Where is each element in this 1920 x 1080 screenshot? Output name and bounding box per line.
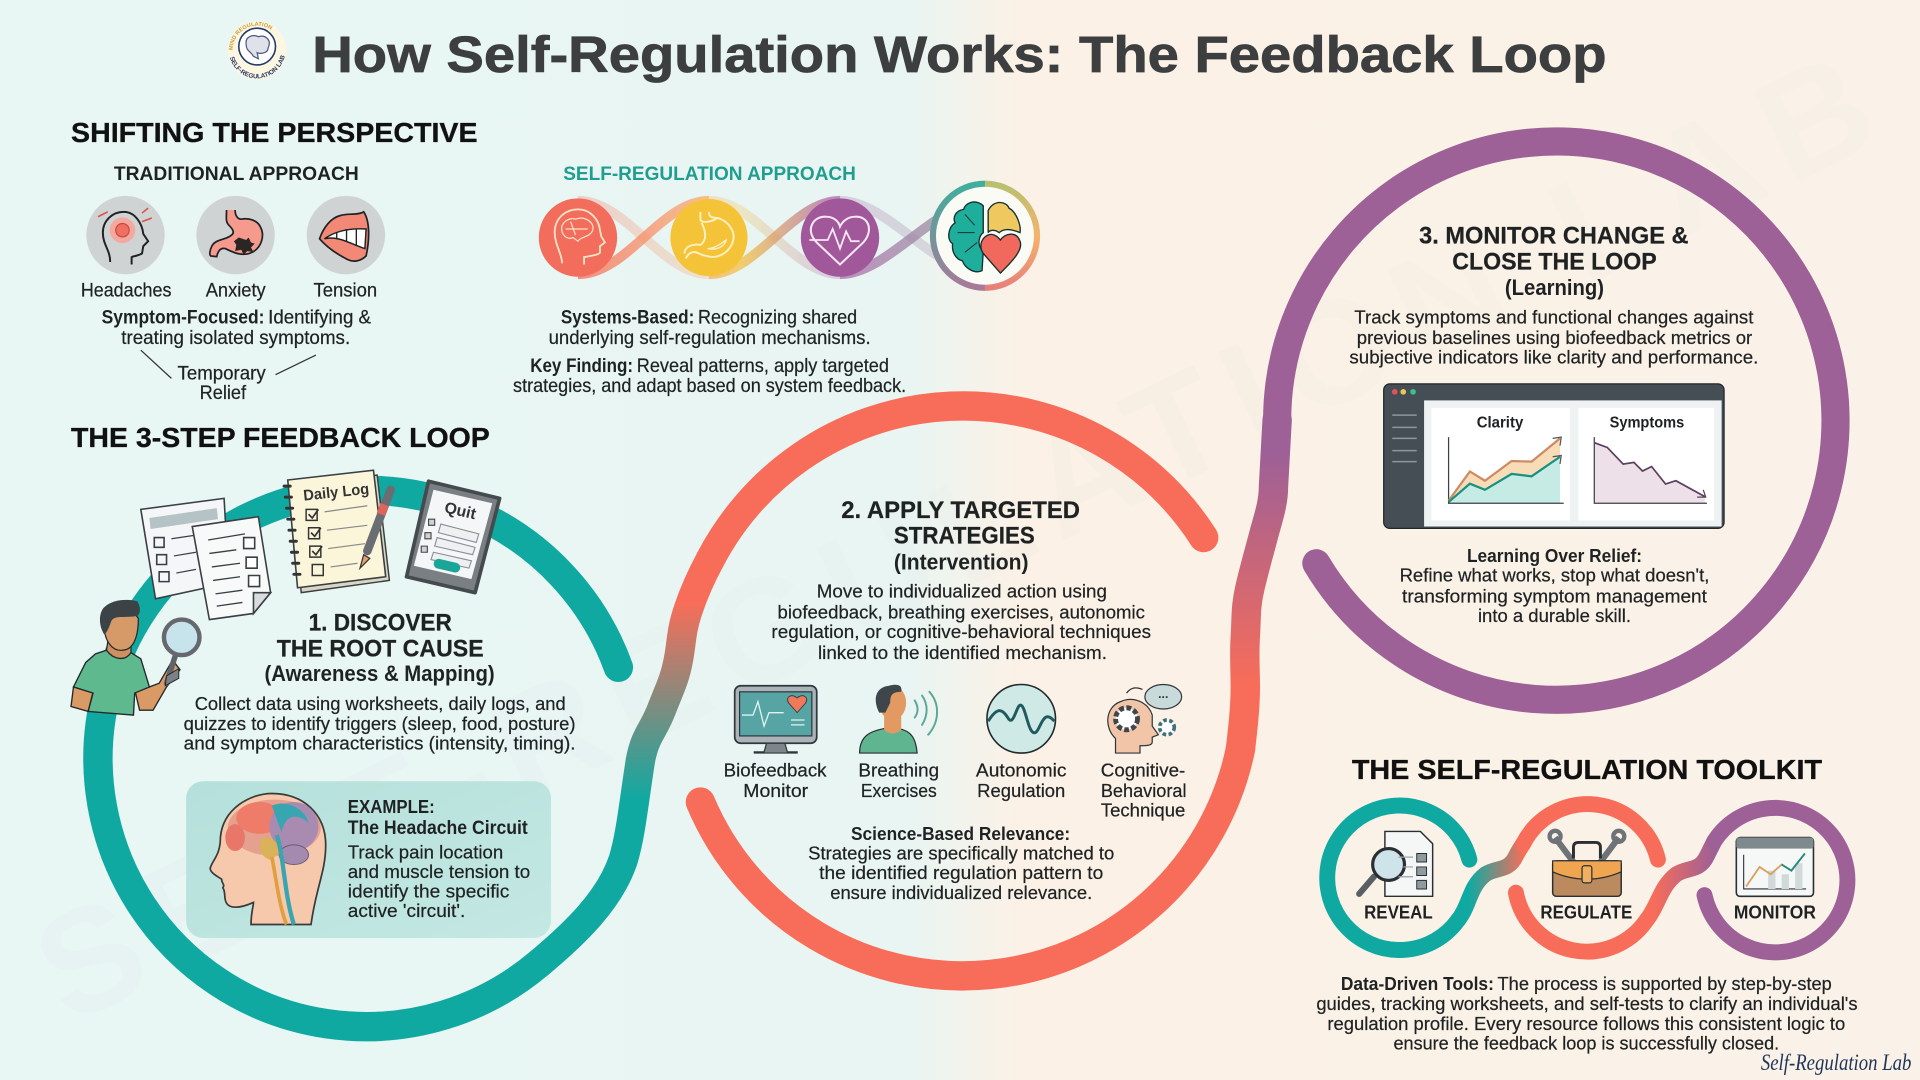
callout: temporary relief — [141, 350, 316, 404]
icon: worksheets — [141, 498, 271, 620]
heading: step 3: CLOSE THE LOOP — [1452, 248, 1657, 275]
icon: headache — [86, 196, 165, 274]
text: systems-based: Recognizing shared — [698, 307, 857, 328]
text: key finding: strategies, and adapt based on system feedback. — [513, 376, 906, 397]
text: key finding: Reveal patterns, apply targeted — [637, 356, 889, 377]
labels: strategy tools: Breathing — [858, 759, 939, 780]
heading: step 3: 3. MONITOR CHANGE & — [1419, 223, 1689, 250]
labels: strategy tools: Cognitive- — [1101, 759, 1185, 780]
heading: step 1: (Awareness & Mapping) — [264, 661, 495, 686]
callout: temporary relief: Temporary — [178, 364, 266, 385]
labels: strategy tools: Exercises — [861, 780, 937, 801]
icon: quiz tablet: Quit — [443, 500, 478, 523]
labels: strategy tools: Technique — [1101, 800, 1185, 821]
heading: step 2: STRATEGIES — [894, 523, 1035, 550]
text: key finding: Key Finding: — [530, 356, 633, 377]
icon: monitor window — [1736, 838, 1813, 896]
logo — [228, 21, 286, 80]
panel: self-regulation approach — [513, 164, 1037, 397]
logo: MIND REGULATION — [228, 22, 272, 50]
icon: quiz tablet — [407, 481, 500, 593]
text: symptom-focused — [102, 307, 371, 349]
chart: clarity — [1431, 408, 1570, 520]
text: learning over relief: Learning Over Relief: — [1467, 545, 1642, 566]
panel: toolkit — [1316, 754, 1858, 1053]
icon: regulate toolkit — [1550, 831, 1624, 896]
icon: integrated brain and heart — [933, 184, 1037, 288]
labels: symptoms: Anxiety — [206, 280, 266, 301]
heading: step 1: 1. DISCOVER — [309, 610, 452, 637]
icon: purple heart pulse — [801, 198, 879, 277]
text: example — [348, 796, 530, 921]
panel: step 2 apply — [724, 497, 1187, 903]
text: step 2 description: linked to the identified mechanism. — [818, 642, 1107, 663]
chart: symptoms: Symptoms — [1610, 414, 1684, 431]
labels: strategy tools: Regulation — [977, 780, 1065, 801]
text: science-based relevance: the identified regulation pattern to — [819, 862, 1103, 883]
labels: symptoms: Headaches — [81, 280, 171, 301]
heading: the 3-step feedback loop: THE 3-STEP FEEDBACK LOOP — [71, 422, 490, 453]
text: example: Track pain location — [348, 841, 503, 862]
icon: daily log notebook: Daily Log — [302, 481, 370, 505]
heading: step 1 — [264, 610, 495, 686]
labels: strategy tools: Biofeedback — [724, 759, 827, 780]
text: systems-based — [549, 307, 871, 349]
panel: step 1 discover — [71, 470, 576, 938]
heading: step 2 — [841, 497, 1080, 574]
callout: temporary relief: Relief — [200, 383, 247, 404]
text: step 2 description: Move to individualized action using — [817, 581, 1107, 602]
text: data-driven tools: Data-Driven Tools: — [1341, 973, 1494, 994]
heading: shifting the perspective: SHIFTING THE PERSPECTIVE — [71, 117, 478, 148]
icon: biofeedback monitor — [735, 686, 817, 753]
labels: strategy tools: Autonomic — [976, 759, 1067, 780]
panel: traditional approach — [81, 164, 385, 404]
text: step 3 description: subjective indicators like clarity and performance. — [1349, 347, 1758, 368]
heading: step 2: 2. APPLY TARGETED — [841, 497, 1080, 524]
labels: symptoms — [81, 280, 377, 301]
text: symptom-focused: Symptom-Focused: — [102, 307, 264, 328]
panel: example headache circuit — [186, 781, 551, 938]
text: step 2 description: biofeedback, breathing exercises, autonomic — [778, 601, 1145, 622]
icon: tension mouth — [307, 196, 385, 274]
title: How Self-Regulation Works: The Feedback Loop — [312, 26, 1607, 83]
text: step 1 description: and symptom characteristics (intensity, timing). — [184, 732, 576, 753]
text: symptom-focused: Identifying & — [268, 307, 371, 328]
text: step 3 description: previous baselines using biofeedback metrics or — [1357, 327, 1752, 348]
icon: cognitive behavioral — [1108, 684, 1182, 753]
chart: dashboard — [1384, 384, 1724, 528]
heading: toolkit: THE SELF-REGULATION TOOLKIT — [1352, 754, 1822, 785]
icon: person with magnifier — [71, 600, 199, 715]
text: step 1 description: quizzes to identify triggers (sleep, food, posture) — [184, 713, 576, 734]
text: example: and muscle tension to — [348, 861, 530, 882]
text: learning over relief: into a durable skill. — [1478, 605, 1631, 626]
icon: head with brain circuit — [210, 793, 326, 924]
text: learning over relief: Refine what works, stop what doesn't, — [1400, 565, 1709, 586]
icon: gold stomach — [670, 199, 748, 276]
heading: step 3: (Learning) — [1505, 275, 1604, 300]
chart: clarity: Clarity — [1477, 414, 1523, 431]
text: step 2 description: regulation, or cognitive-behavioral techniques — [771, 621, 1151, 642]
text: science-based relevance: ensure individualized relevance. — [830, 882, 1092, 903]
heading: step 2: (Intervention) — [894, 549, 1029, 574]
text: science-based relevance — [808, 823, 1114, 903]
toolkit rings — [1327, 804, 1847, 952]
text: science-based relevance: Strategies are specifically matched to — [808, 843, 1114, 864]
text: key finding — [513, 356, 906, 397]
text: data-driven tools — [1316, 973, 1858, 1053]
text: science-based relevance: Science-Based Relevance: — [851, 823, 1070, 844]
label: regulate: REGULATE — [1540, 901, 1632, 922]
labels: strategy tools: Monitor — [743, 780, 808, 801]
text: example: The Headache Circuit — [348, 818, 528, 839]
text: data-driven tools: guides, tracking worksheets, and self-tests to clarify an individual's — [1316, 993, 1858, 1014]
panel: step 3 monitor — [1349, 223, 1758, 626]
loop: feedback ribbon — [98, 141, 1836, 1027]
labels: strategy tools: Behavioral — [1101, 780, 1187, 801]
text: systems-based: Systems-Based: — [561, 307, 694, 328]
text: example: identify the specific — [348, 881, 509, 902]
text: systems-based: underlying self-regulation mechanisms. — [549, 328, 871, 349]
icon: daily log notebook — [284, 470, 391, 593]
panel: shifting the perspective — [71, 117, 1037, 404]
heading: self-regulation approach: SELF-REGULATION APPROACH — [563, 164, 856, 185]
text: example: active 'circuit'. — [348, 900, 465, 921]
text: step 2 description — [771, 581, 1151, 663]
text: step 3 description: Track symptoms and functional changes against — [1354, 306, 1753, 327]
labels: symptoms: Tension — [313, 280, 377, 301]
text: learning over relief — [1400, 545, 1709, 626]
text: step 3 description — [1349, 306, 1758, 368]
labels: strategy tools — [724, 759, 1187, 821]
text: step 1 description: Collect data using worksheets, daily logs, and — [195, 693, 566, 714]
icon: breathing person — [860, 685, 937, 753]
chart: symptoms — [1578, 408, 1714, 520]
heading: step 3 — [1419, 223, 1689, 300]
text: example: EXAMPLE: — [348, 796, 435, 817]
text: data-driven tools: ensure the feedback loop is successfully closed. — [1393, 1032, 1779, 1053]
text: data-driven tools: regulation profile. Every resource follows this consistent logic to — [1327, 1013, 1845, 1034]
text: step 1 description — [184, 693, 576, 753]
label: reveal: REVEAL — [1364, 901, 1433, 922]
helix strands — [578, 201, 984, 274]
text: learning over relief: transforming symptom management — [1402, 585, 1707, 606]
text: symptom-focused: treating isolated symptoms. — [121, 328, 350, 349]
icon: anxiety stomach — [196, 196, 275, 274]
label: monitor: MONITOR — [1734, 901, 1816, 922]
text: data-driven tools: The process is supported by step-by-step — [1498, 973, 1832, 994]
heading: step 1: THE ROOT CAUSE — [277, 635, 484, 662]
icon: autonomic regulation wave — [987, 684, 1056, 753]
icon: cognitive behavioral: ... — [1158, 687, 1168, 701]
heading: traditional approach: TRADITIONAL APPROACH — [114, 164, 359, 185]
logo: SELF-REGULATION LAB — [230, 55, 284, 78]
icon: coral brain head — [539, 198, 617, 277]
icon: reveal — [1359, 831, 1433, 896]
